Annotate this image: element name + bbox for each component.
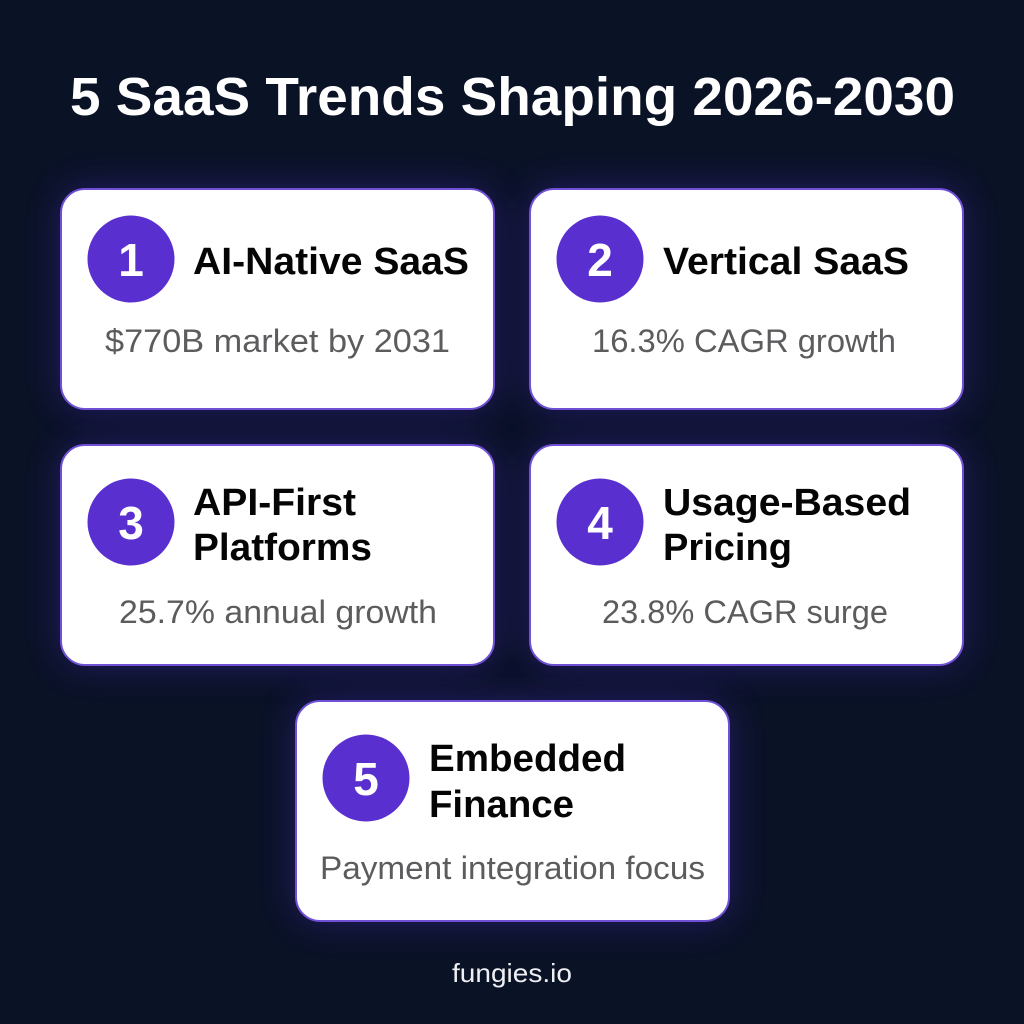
heading: Usage-Based xyxy=(663,482,911,524)
panel: Embedded Finance xyxy=(296,701,729,921)
number badge 4 xyxy=(556,478,644,566)
panel: Vertical SaaS xyxy=(530,189,963,409)
heading: AI-Native SaaS xyxy=(193,241,469,283)
heading xyxy=(429,738,626,826)
heading xyxy=(663,482,911,569)
number badge 5 xyxy=(322,734,410,822)
footer brand: fungies.io xyxy=(452,958,572,988)
stat text: 25.7% annual growth xyxy=(119,594,437,630)
number badge 3: 3 xyxy=(118,497,144,549)
heading: Platforms xyxy=(193,527,372,569)
stat text: $770B market by 2031 xyxy=(105,323,450,359)
number badge 4: 4 xyxy=(587,497,613,549)
heading: API-First xyxy=(193,482,356,524)
number badge 1: 1 xyxy=(118,234,144,286)
panel: Usage-Based Pricing xyxy=(530,445,963,665)
stat text: 23.8% CAGR surge xyxy=(602,594,888,630)
stat text: Payment integration focus xyxy=(320,850,705,886)
stat text: 16.3% CAGR growth xyxy=(592,323,896,359)
number badge 2 xyxy=(556,216,644,302)
number badge 3 xyxy=(88,478,174,566)
number badge 5: 5 xyxy=(353,753,379,805)
panel: API-First Platforms xyxy=(61,445,494,665)
heading: Vertical SaaS xyxy=(663,241,909,283)
panel: AI-Native SaaS xyxy=(61,189,494,409)
heading: Pricing xyxy=(663,527,792,569)
heading: Embedded xyxy=(429,738,626,780)
heading: Finance xyxy=(429,784,574,826)
number badge 2: 2 xyxy=(587,234,613,286)
number badge 1 xyxy=(88,216,174,302)
title: 5 SaaS Trends Shaping 2026-2030 xyxy=(70,67,955,127)
heading xyxy=(193,482,372,569)
